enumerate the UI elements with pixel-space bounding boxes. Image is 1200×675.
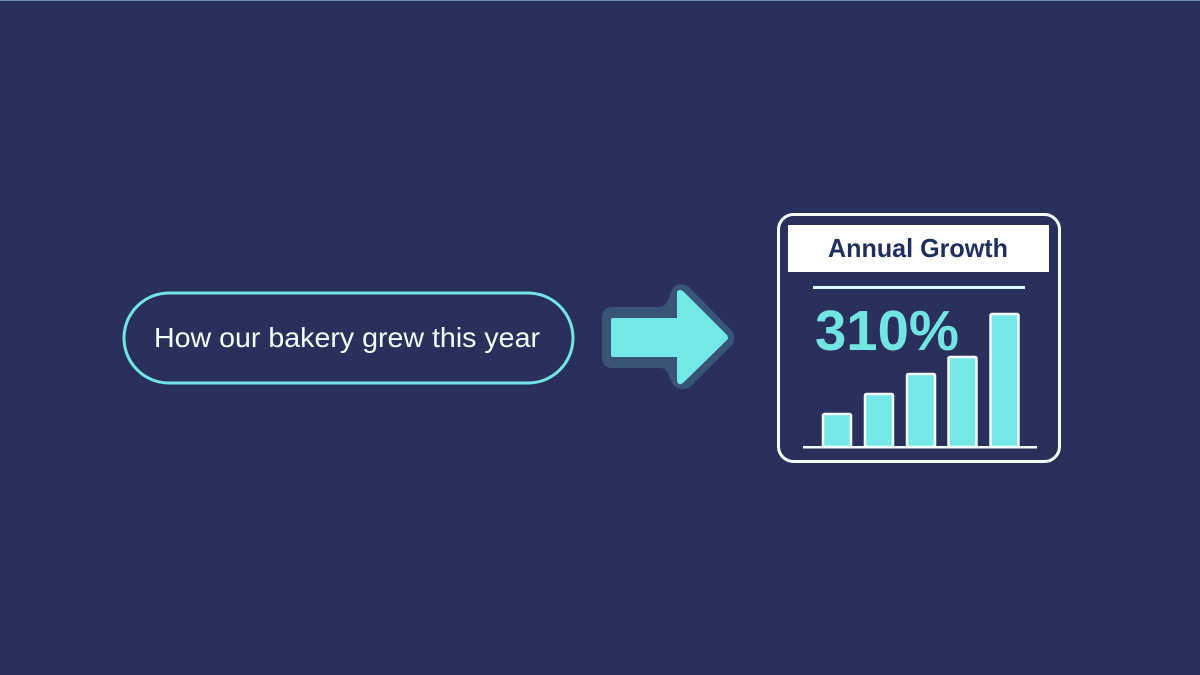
growth figure: 310%	[815, 299, 959, 363]
arrow pointing to growth card	[602, 284, 734, 389]
bar 3	[907, 374, 935, 447]
bar 2	[865, 394, 893, 447]
card: annual growth	[778, 214, 1060, 462]
card title bar	[788, 225, 1049, 272]
bar 5	[990, 314, 1018, 447]
card title text: Annual Growth	[828, 233, 1008, 263]
chart baseline	[803, 446, 1037, 448]
pill: topic label	[124, 293, 573, 383]
bar 1	[823, 414, 851, 447]
bar chart	[803, 314, 1037, 448]
pill text: How our bakery grew this year	[154, 322, 540, 353]
bar 4	[948, 357, 976, 447]
